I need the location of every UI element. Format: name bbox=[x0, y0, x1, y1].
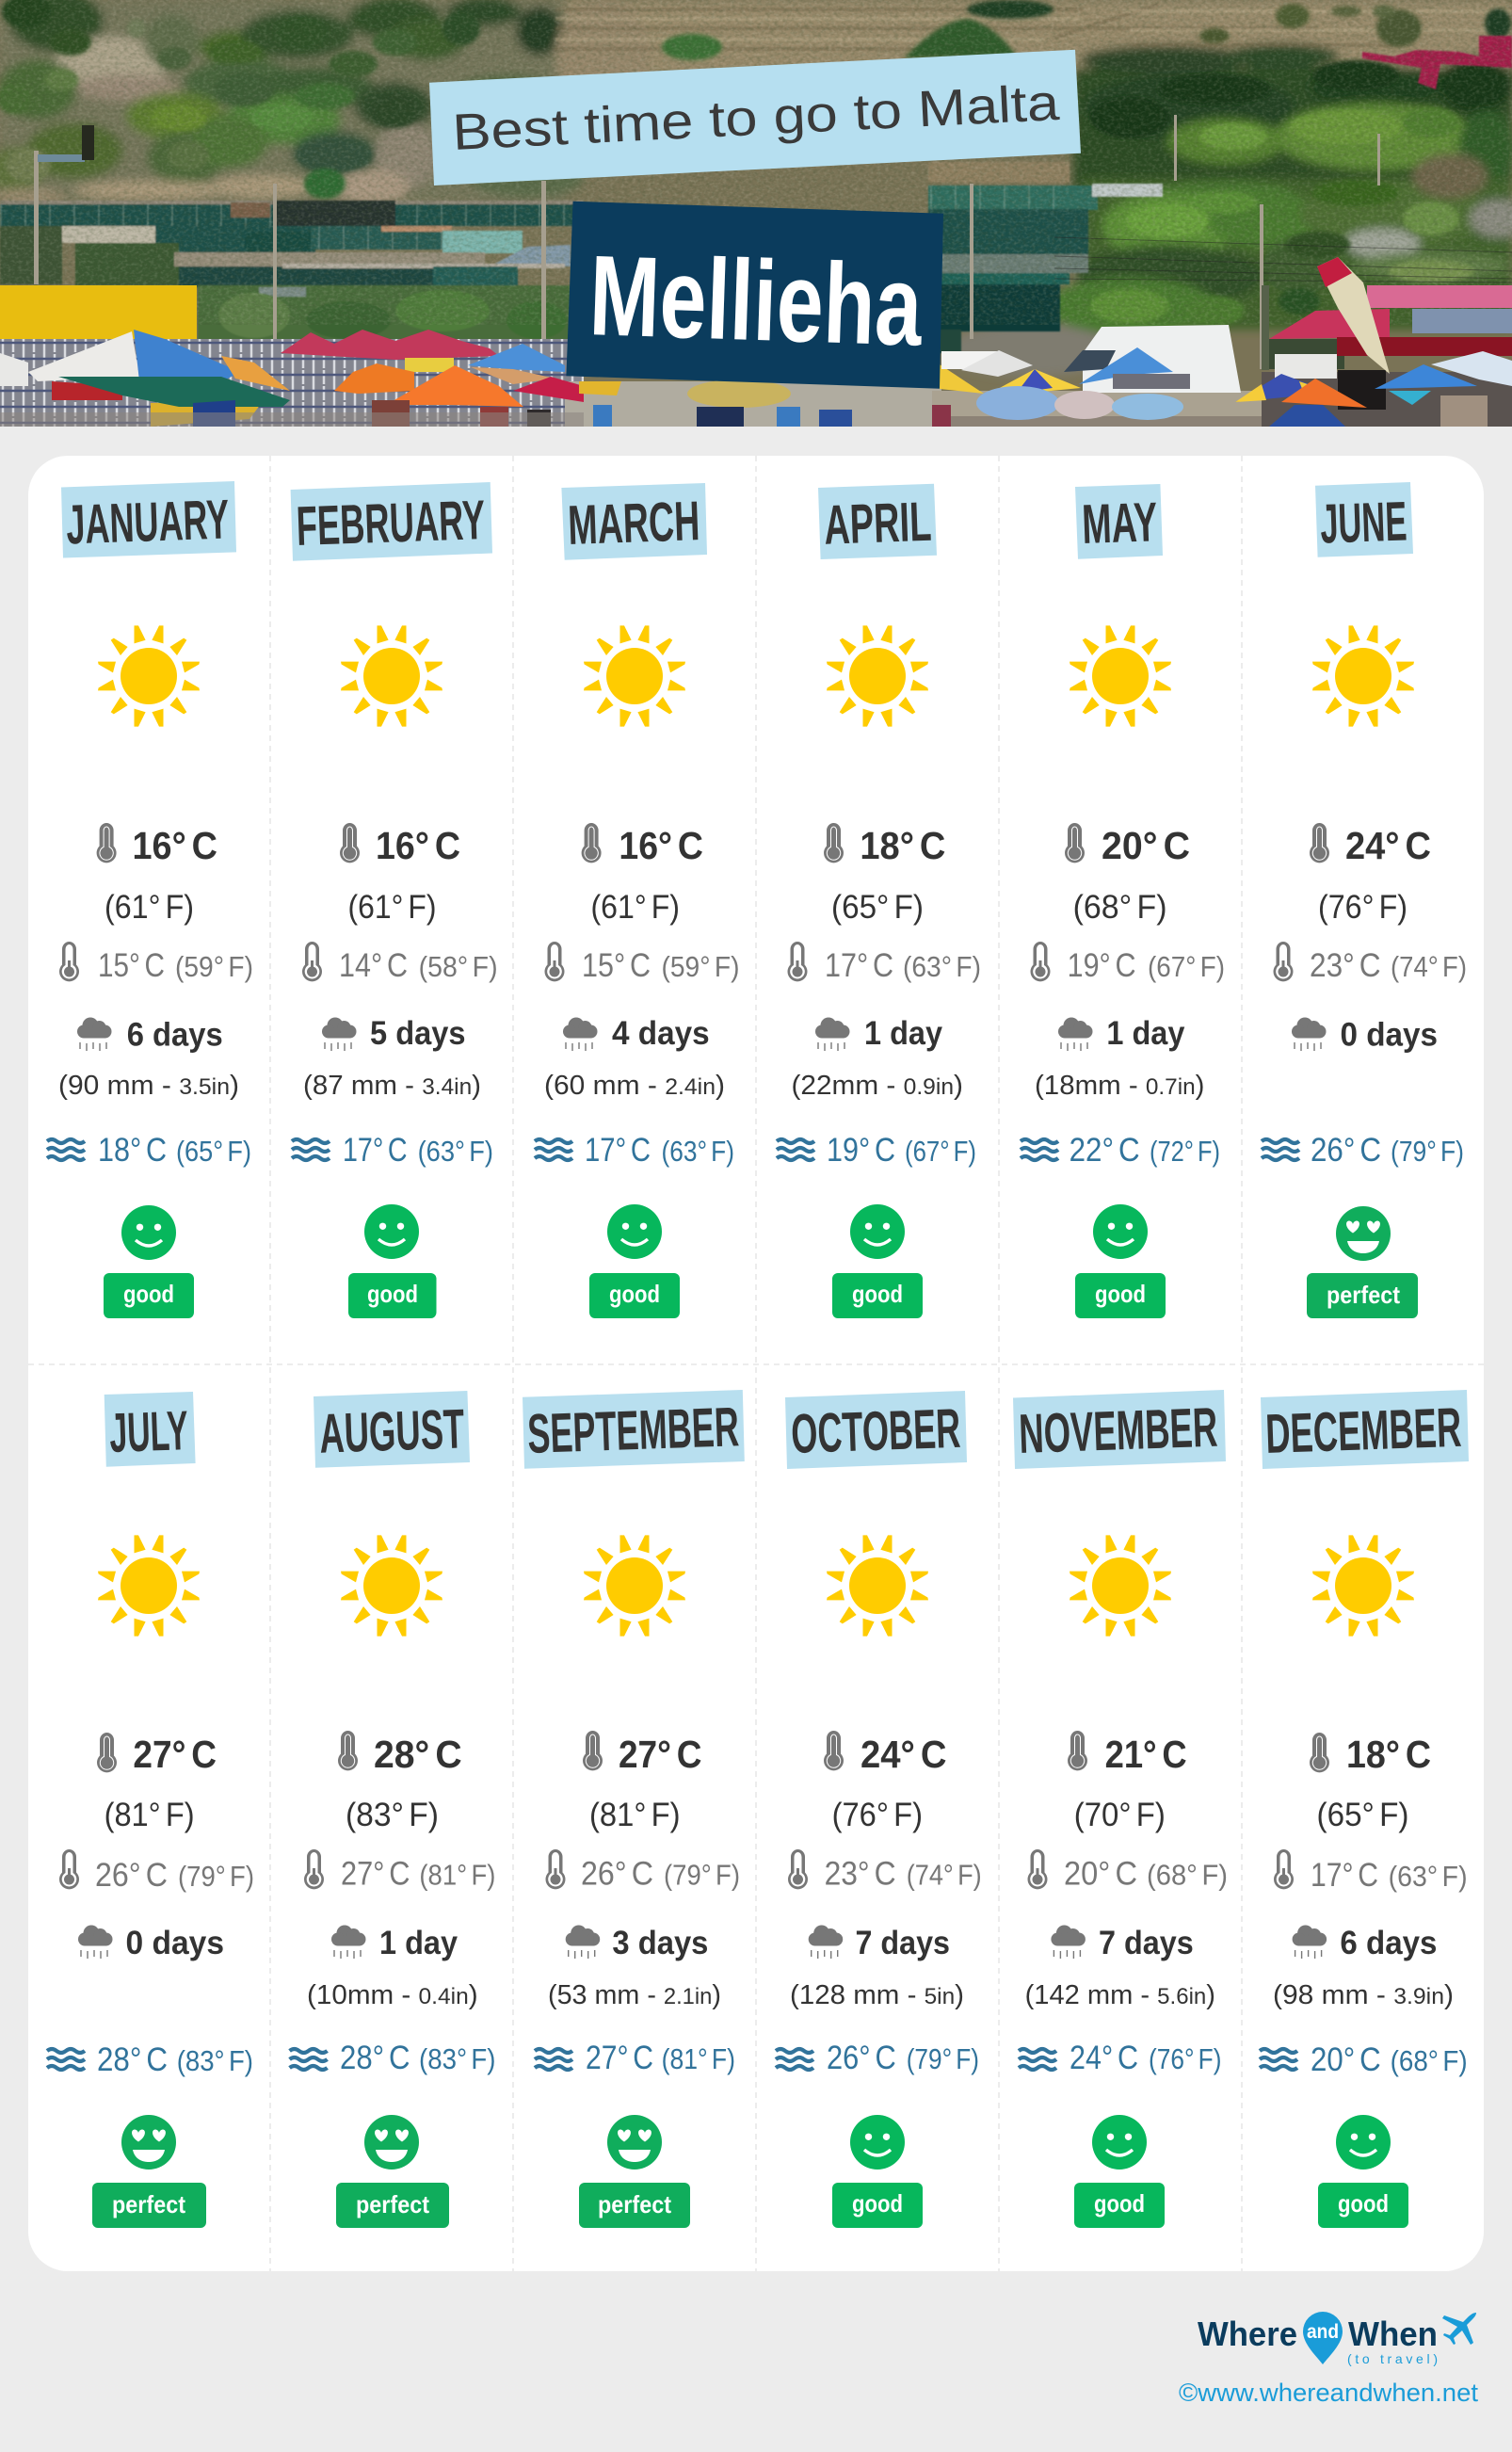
rainy days: 7 days bbox=[855, 1925, 950, 1961]
daytime temperature: 21° C bbox=[1105, 1733, 1187, 1776]
sea temperature: 26° C bbox=[1311, 1132, 1381, 1169]
rainy days bbox=[563, 1015, 710, 1052]
icon: sun bbox=[341, 625, 442, 727]
sea temperature: 28° C bbox=[340, 2040, 410, 2076]
night temperature bbox=[1273, 942, 1467, 984]
rating: perfect bbox=[92, 2115, 206, 2228]
daytime temperature: 16° C bbox=[376, 824, 460, 867]
month label: FEBRUARY bbox=[296, 489, 486, 557]
rating: good bbox=[1074, 2115, 1165, 2228]
shrubs and trees bbox=[0, 0, 1511, 326]
night temperature: (79° F) bbox=[178, 1860, 254, 1893]
panel: June bbox=[1262, 482, 1467, 1318]
sea temperature: 18° C bbox=[98, 1132, 167, 1169]
night temperature bbox=[544, 942, 740, 984]
sea temperature: (63° F) bbox=[418, 1135, 493, 1168]
logo: Where and When (to travel): When bbox=[1348, 2315, 1438, 2353]
rainfall: (90 mm - 3.5in) bbox=[58, 1071, 239, 1101]
website credit: ©www.whereandwhen.net bbox=[1179, 2379, 1478, 2407]
panel: July bbox=[47, 1392, 254, 2228]
sea temperature: (65° F) bbox=[176, 1135, 251, 1168]
daytime temperature: 27° C bbox=[619, 1733, 701, 1776]
rainfall: (87 mm - 3.4in) bbox=[303, 1071, 481, 1101]
sea temperature: (63° F) bbox=[661, 1135, 734, 1168]
sea temperature bbox=[290, 2040, 495, 2076]
sea temperature bbox=[1260, 2041, 1468, 2078]
sea temperature: 24° C bbox=[1070, 2040, 1138, 2076]
rating: good bbox=[1318, 2115, 1408, 2228]
rating: good bbox=[348, 1204, 437, 1318]
sea temperature: 20° C bbox=[1311, 2041, 1381, 2078]
month label: JANUARY bbox=[65, 488, 230, 556]
rating: good: good bbox=[609, 1280, 660, 1308]
daytime temperature fahrenheit: (65° F) bbox=[831, 889, 924, 926]
sea temperature bbox=[1262, 1132, 1464, 1169]
daytime temperature fahrenheit: (68° F) bbox=[1073, 889, 1167, 926]
night temperature: (74° F) bbox=[1391, 950, 1467, 983]
month label bbox=[1075, 484, 1163, 559]
month label bbox=[1315, 482, 1413, 557]
month label bbox=[61, 481, 236, 557]
sea temperature: (79° F) bbox=[907, 2042, 979, 2075]
sea temperature: 17° C bbox=[585, 1132, 651, 1169]
icon: sun bbox=[98, 625, 200, 727]
sea temperature: 17° C bbox=[343, 1132, 407, 1169]
rainy days bbox=[78, 1925, 224, 1961]
night temperature: 17° C bbox=[1311, 1857, 1378, 1894]
rating: good: good bbox=[367, 1280, 418, 1308]
daytime temperature bbox=[97, 823, 217, 867]
location banner: Mellieha: Mellieha bbox=[587, 231, 925, 370]
rainfall: (98 mm - 3.9in) bbox=[1273, 1980, 1454, 2010]
rating: good: good bbox=[852, 2189, 903, 2218]
panel: October bbox=[776, 1391, 982, 2228]
month label: MARCH bbox=[567, 490, 700, 557]
rainy days: 6 days bbox=[127, 1017, 223, 1054]
month label: MAY bbox=[1081, 491, 1158, 556]
rating: good bbox=[589, 1204, 680, 1318]
rating: good: good bbox=[1094, 2189, 1145, 2218]
night temperature: (59° F) bbox=[661, 950, 740, 983]
rainy days: 3 days bbox=[612, 1925, 708, 1961]
icon: sun bbox=[98, 1535, 200, 1637]
month label: OCTOBER bbox=[790, 1397, 961, 1465]
daytime temperature: 24° C bbox=[1345, 824, 1431, 867]
rating: perfect: perfect bbox=[1327, 1281, 1400, 1309]
month label bbox=[105, 1392, 196, 1467]
rainfall: (22mm - 0.9in) bbox=[791, 1071, 963, 1101]
night temperature: 15° C bbox=[582, 947, 651, 984]
daytime temperature fahrenheit: (76° F) bbox=[832, 1797, 923, 1833]
rainy days bbox=[1051, 1925, 1194, 1961]
sea temperature bbox=[1019, 2040, 1222, 2076]
panel: August bbox=[290, 1391, 495, 2228]
night temperature: (63° F) bbox=[903, 950, 981, 983]
sea temperature bbox=[535, 2040, 735, 2076]
rating: good: good bbox=[1095, 1280, 1146, 1308]
calendar panel bbox=[28, 456, 1484, 2271]
logo: Where and When (to travel): (to travel) bbox=[1347, 2351, 1438, 2366]
header photo: Mellieha beach and hillside bbox=[0, 0, 1512, 427]
month label bbox=[291, 482, 492, 561]
month label bbox=[561, 483, 707, 560]
night temperature bbox=[1028, 1849, 1228, 1893]
month label: NOVEMBER bbox=[1018, 1396, 1218, 1465]
month label bbox=[314, 1391, 470, 1468]
night temperature: 23° C bbox=[1310, 947, 1381, 984]
rainfall: (10mm - 0.4in) bbox=[307, 1980, 478, 2010]
location banner: Mellieha bbox=[566, 202, 943, 389]
rainy days: 5 days bbox=[370, 1015, 465, 1052]
night temperature: 26° C bbox=[95, 1857, 168, 1894]
daytime temperature bbox=[1310, 823, 1431, 867]
rainy days bbox=[566, 1925, 708, 1961]
rainy days: 1 day bbox=[864, 1015, 942, 1052]
umbrellas, centre bbox=[579, 381, 621, 395]
sea temperature bbox=[776, 2040, 979, 2076]
night temperature: (58° F) bbox=[419, 950, 498, 983]
daytime temperature: 20° C bbox=[1102, 824, 1190, 867]
sea temperature: 26° C bbox=[827, 2040, 896, 2076]
sea temperature bbox=[47, 1132, 251, 1169]
sea temperature: 22° C bbox=[1070, 1132, 1140, 1169]
daytime temperature: 24° C bbox=[861, 1733, 947, 1776]
rainy days: 7 days bbox=[1099, 1925, 1194, 1961]
rainy days bbox=[809, 1925, 950, 1961]
rainy days bbox=[331, 1925, 458, 1961]
icon: sun bbox=[827, 625, 928, 727]
icon: sun bbox=[827, 1535, 928, 1637]
night temperature bbox=[59, 1849, 254, 1894]
night temperature bbox=[1030, 942, 1225, 984]
night temperature bbox=[304, 1849, 495, 1893]
night temperature: (68° F) bbox=[1147, 1859, 1228, 1892]
icon: map pin bbox=[1303, 2312, 1343, 2364]
panel: February bbox=[291, 482, 498, 1318]
overhead wires bbox=[1054, 237, 1512, 282]
icon: sun bbox=[584, 625, 685, 727]
rating: good: good bbox=[123, 1280, 174, 1308]
daytime temperature fahrenheit: (76° F) bbox=[1318, 889, 1407, 926]
month label: APRIL bbox=[823, 491, 932, 557]
rating: perfect bbox=[1307, 1206, 1418, 1318]
daytime temperature fahrenheit: (65° F) bbox=[1316, 1797, 1408, 1833]
night temperature bbox=[59, 942, 253, 984]
daytime temperature fahrenheit: (83° F) bbox=[346, 1797, 439, 1833]
rating: good bbox=[832, 2115, 923, 2228]
daytime temperature fahrenheit: (61° F) bbox=[348, 889, 437, 926]
daytime temperature: 18° C bbox=[1346, 1733, 1431, 1776]
night temperature: (59° F) bbox=[175, 950, 253, 983]
daytime temperature bbox=[1310, 1733, 1431, 1776]
night temperature: 26° C bbox=[581, 1856, 653, 1893]
rainfall: (60 mm - 2.4in) bbox=[544, 1071, 725, 1101]
rainfall: (128 mm - 5in) bbox=[790, 1980, 964, 2010]
daytime temperature bbox=[1068, 1731, 1187, 1776]
umbrellas, right bbox=[940, 364, 984, 394]
sea temperature bbox=[777, 1132, 976, 1169]
sea temperature: (67° F) bbox=[905, 1135, 976, 1168]
beach chairs and ground bbox=[0, 339, 584, 427]
panel: November bbox=[1013, 1390, 1228, 2228]
yellow hoarding bbox=[0, 285, 197, 340]
night temperature: 14° C bbox=[339, 947, 408, 984]
daytime temperature: 16° C bbox=[132, 824, 217, 867]
daytime temperature fahrenheit: (70° F) bbox=[1074, 1797, 1166, 1833]
hillside buildings bbox=[0, 36, 1512, 353]
night temperature: 19° C bbox=[1068, 947, 1136, 984]
rainy days: 6 days bbox=[1340, 1925, 1437, 1961]
rating: good: good bbox=[1338, 2189, 1389, 2218]
rainy days: 1 day bbox=[1106, 1015, 1185, 1052]
logo: Where and When (to travel) bbox=[1198, 2312, 1476, 2366]
daytime temperature: 28° C bbox=[374, 1733, 462, 1776]
terraces bbox=[555, 5, 1512, 49]
panel: September bbox=[523, 1390, 745, 2228]
daytime temperature bbox=[583, 1731, 701, 1776]
month label bbox=[523, 1390, 745, 1469]
sea temperature: (68° F) bbox=[1391, 2044, 1468, 2077]
daytime temperature bbox=[338, 1731, 462, 1776]
sea temperature: 19° C bbox=[827, 1132, 895, 1169]
night temperature: (74° F) bbox=[907, 1859, 982, 1892]
sea temperature: 28° C bbox=[97, 2041, 168, 2078]
sea temperature: (83° F) bbox=[419, 2042, 495, 2075]
night temperature bbox=[546, 1849, 740, 1893]
night temperature: (79° F) bbox=[664, 1859, 740, 1892]
daytime temperature bbox=[1065, 823, 1190, 867]
sea temperature: (83° F) bbox=[177, 2044, 253, 2077]
rating: perfect: perfect bbox=[356, 2190, 429, 2218]
icon: sun bbox=[1312, 1535, 1414, 1637]
month label bbox=[818, 484, 937, 559]
rating: good bbox=[1075, 1204, 1166, 1318]
rainy days bbox=[815, 1015, 942, 1052]
rainfall: (18mm - 0.7in) bbox=[1035, 1071, 1205, 1101]
panel: January bbox=[47, 481, 253, 1318]
night temperature bbox=[302, 942, 498, 984]
rating: perfect: perfect bbox=[112, 2190, 185, 2218]
daytime temperature bbox=[824, 1731, 947, 1776]
night temperature: 27° C bbox=[341, 1856, 410, 1893]
daytime temperature bbox=[97, 1733, 217, 1776]
night temperature: 20° C bbox=[1064, 1856, 1137, 1893]
daytime temperature fahrenheit: (61° F) bbox=[591, 889, 680, 926]
rating: perfect bbox=[336, 2115, 449, 2228]
rainy days: 1 day bbox=[379, 1925, 458, 1961]
icon: sun bbox=[1312, 625, 1414, 727]
icon: sun bbox=[584, 1535, 685, 1637]
sea temperature bbox=[47, 2041, 253, 2078]
daytime temperature: 27° C bbox=[133, 1733, 217, 1776]
night temperature: (63° F) bbox=[1389, 1860, 1468, 1893]
rating: perfect: perfect bbox=[598, 2190, 671, 2218]
sea temperature bbox=[292, 1132, 493, 1169]
rating: good bbox=[104, 1205, 194, 1318]
sea temperature bbox=[535, 1132, 734, 1169]
title banner: Best time to go to Malta bbox=[429, 50, 1081, 186]
night temperature: (81° F) bbox=[419, 1859, 495, 1892]
rainy days bbox=[1293, 1925, 1437, 1961]
icon: sun bbox=[1070, 1535, 1171, 1637]
rainfall: (53 mm - 2.1in) bbox=[548, 1980, 721, 2010]
panel: April bbox=[777, 484, 981, 1318]
sea temperature: (81° F) bbox=[662, 2042, 735, 2075]
sea temperature: (72° F) bbox=[1150, 1135, 1220, 1168]
sea temperature bbox=[1021, 1132, 1220, 1169]
panel: May bbox=[1021, 484, 1225, 1318]
month label bbox=[1013, 1390, 1226, 1469]
daytime temperature bbox=[582, 823, 703, 867]
rainy days: 0 days bbox=[1341, 1017, 1438, 1054]
month label: JULY bbox=[108, 1399, 189, 1464]
daytime temperature fahrenheit: (81° F) bbox=[589, 1797, 680, 1833]
daytime temperature: 18° C bbox=[860, 824, 945, 867]
sea temperature: 27° C bbox=[586, 2040, 653, 2076]
poles and traffic lights bbox=[34, 115, 1380, 369]
daytime temperature bbox=[340, 823, 460, 867]
icon: sun bbox=[1070, 625, 1171, 727]
rainy days bbox=[322, 1015, 465, 1052]
rainy days bbox=[1292, 1017, 1438, 1054]
logo: Where and When (to travel): Where bbox=[1198, 2315, 1297, 2353]
title banner: Best time to go to Malta: Best time to go to Malta bbox=[451, 74, 1061, 161]
daytime temperature fahrenheit: (61° F) bbox=[105, 889, 194, 926]
panel: March bbox=[535, 483, 740, 1318]
rainy days: 4 days bbox=[612, 1015, 710, 1052]
rainy days bbox=[1058, 1015, 1185, 1052]
rainy days: 0 days bbox=[126, 1925, 224, 1961]
night temperature: 17° C bbox=[825, 947, 893, 984]
sea temperature: (79° F) bbox=[1391, 1135, 1464, 1168]
month label: AUGUST bbox=[318, 1397, 465, 1465]
rainfall: (142 mm - 5.6in) bbox=[1025, 1980, 1215, 2010]
night temperature: 23° C bbox=[825, 1856, 896, 1893]
daytime temperature bbox=[824, 823, 945, 867]
daytime temperature fahrenheit: (81° F) bbox=[105, 1797, 195, 1833]
panel: December bbox=[1260, 1390, 1469, 2228]
night temperature bbox=[787, 942, 981, 984]
umbrellas, left bbox=[0, 353, 28, 386]
daytime temperature: 16° C bbox=[619, 824, 703, 867]
night temperature bbox=[1274, 1849, 1468, 1894]
month label: JUNE bbox=[1319, 491, 1407, 556]
icon: plane bbox=[1442, 2313, 1476, 2345]
icon: sun bbox=[341, 1535, 442, 1637]
month label: SEPTEMBER bbox=[526, 1395, 740, 1465]
sea temperature: (76° F) bbox=[1149, 2042, 1222, 2075]
night temperature: 15° C bbox=[98, 947, 165, 984]
rating: good bbox=[832, 1204, 923, 1318]
grain overlay on the photo bbox=[0, 0, 1512, 325]
rating: good: good bbox=[852, 1280, 903, 1308]
night temperature: (67° F) bbox=[1148, 950, 1225, 983]
night temperature bbox=[788, 1849, 982, 1893]
logo: Where and When (to travel): and bbox=[1307, 2321, 1339, 2343]
rating: perfect bbox=[579, 2115, 690, 2228]
rainy days bbox=[77, 1017, 223, 1054]
month label bbox=[785, 1391, 967, 1469]
